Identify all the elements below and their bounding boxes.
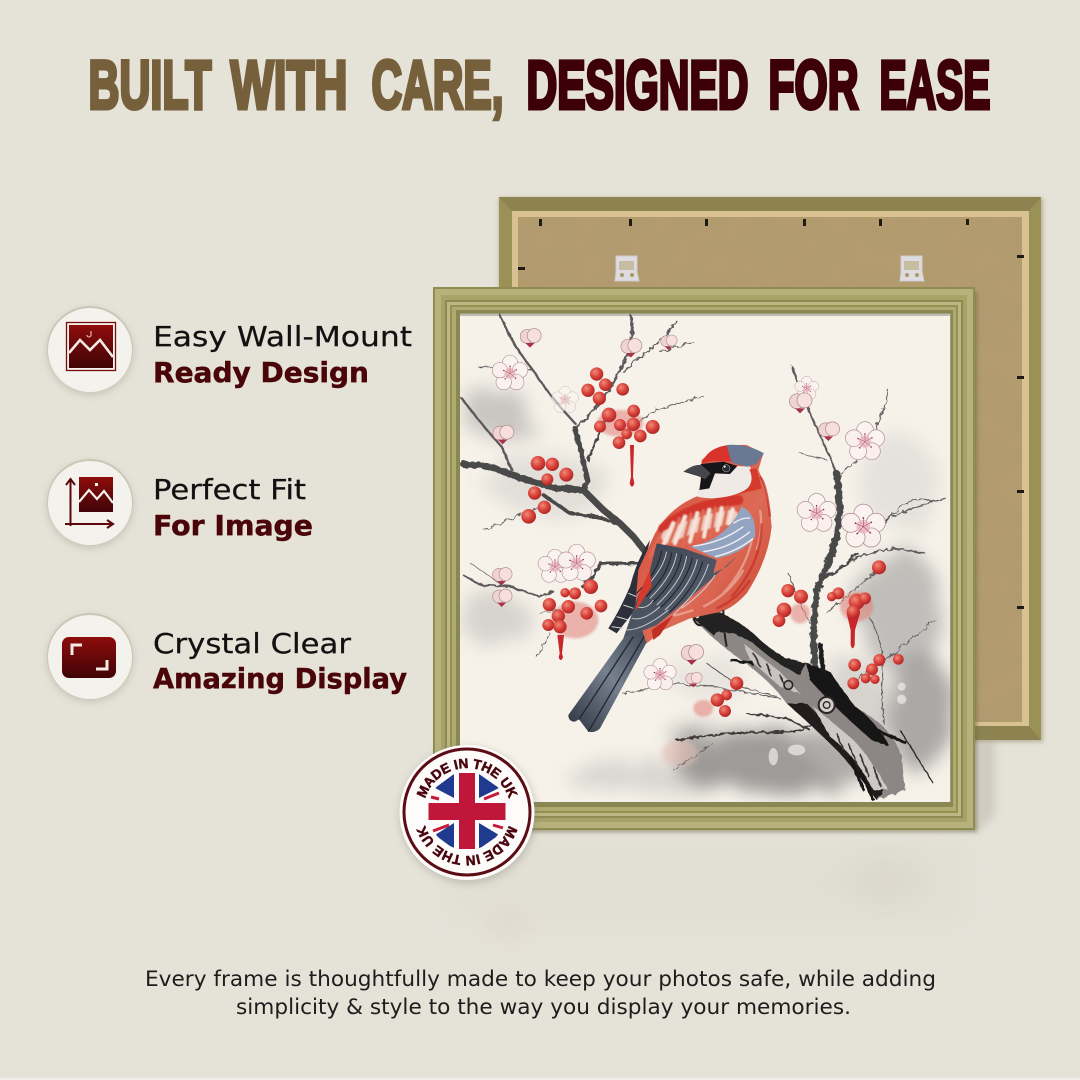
blossoms: [492, 329, 885, 690]
front frame: [433, 287, 977, 832]
caption: Every frame is thoughtfully made to keep your photos safe, while adding: [145, 967, 936, 992]
text: perfect fit: For Image: [153, 509, 313, 542]
back frame shadow: [975, 740, 995, 835]
body: [635, 445, 772, 643]
text: perfect fit: [153, 473, 313, 542]
drips: [557, 445, 860, 660]
frame reflection below: [450, 840, 970, 939]
beak: [683, 465, 711, 479]
inner shadow of frame over painting: [460, 313, 950, 316]
text: crystal clear: Amazing Display: [153, 662, 407, 695]
ink washes: [463, 387, 952, 793]
tail: [568, 630, 646, 732]
union jack flag: [428, 773, 506, 849]
title: [88, 46, 990, 124]
hanger right: [900, 256, 924, 281]
text: easy wall-mount: Ready Design: [153, 356, 369, 389]
pale chest feathers: [650, 500, 738, 557]
face mask: [699, 462, 737, 490]
feature: crystal clear: [47, 613, 407, 702]
icon: wall mount picture: [47, 306, 133, 395]
title: FOR: [768, 46, 858, 124]
side red flank: [635, 570, 652, 612]
blue shoulder feathers: [690, 507, 755, 558]
thin branches: [462, 315, 945, 783]
badge lettering: MADE IN THE UK: [416, 758, 518, 800]
crown: [702, 445, 732, 463]
title: CARE,: [372, 46, 504, 124]
staples: [518, 219, 1024, 609]
title: WITH: [230, 46, 348, 124]
bird: [568, 445, 772, 732]
icon: picture with size arrows: [47, 459, 133, 548]
feature: perfect fit: [47, 459, 313, 548]
berries: [521, 367, 904, 717]
text: crystal clear: [153, 627, 407, 695]
hanger left: [615, 256, 639, 281]
text: crystal clear: Crystal Clear: [153, 627, 352, 660]
eye: [721, 463, 732, 474]
badge lettering: [416, 758, 528, 872]
main trunk: [693, 612, 907, 800]
badge lettering: MADE IN THE UK: [416, 824, 518, 866]
thick upper branches: [463, 417, 857, 673]
title: DESIGNED: [526, 46, 748, 124]
title: BUILT: [88, 46, 212, 124]
flank streaks: [673, 510, 761, 615]
caption: simplicity & style to the way you display your memories.: [236, 995, 851, 1020]
text: perfect fit: Perfect Fit: [153, 473, 306, 506]
back of frame: [499, 197, 1043, 742]
title: EASE: [880, 46, 990, 124]
caption: [145, 967, 936, 1020]
feature: easy wall-mount: [47, 306, 412, 395]
claws: [693, 610, 727, 647]
cardboard backing with cream liner: [512, 211, 1029, 726]
trunk knots: [784, 681, 835, 713]
outer wing feathers: [608, 540, 650, 633]
text: easy wall-mount: [153, 320, 412, 389]
paint splashes: [552, 410, 873, 717]
throat and cheek: [697, 465, 756, 498]
framed painting: bird on blossom branch: [460, 313, 952, 802]
badge: made in the UK: [397, 744, 538, 886]
text: easy wall-mount: Easy Wall-Mount: [153, 320, 412, 353]
dark wing: [623, 543, 738, 638]
icon: screen with corners: [47, 613, 133, 702]
painting paper: [460, 313, 950, 802]
